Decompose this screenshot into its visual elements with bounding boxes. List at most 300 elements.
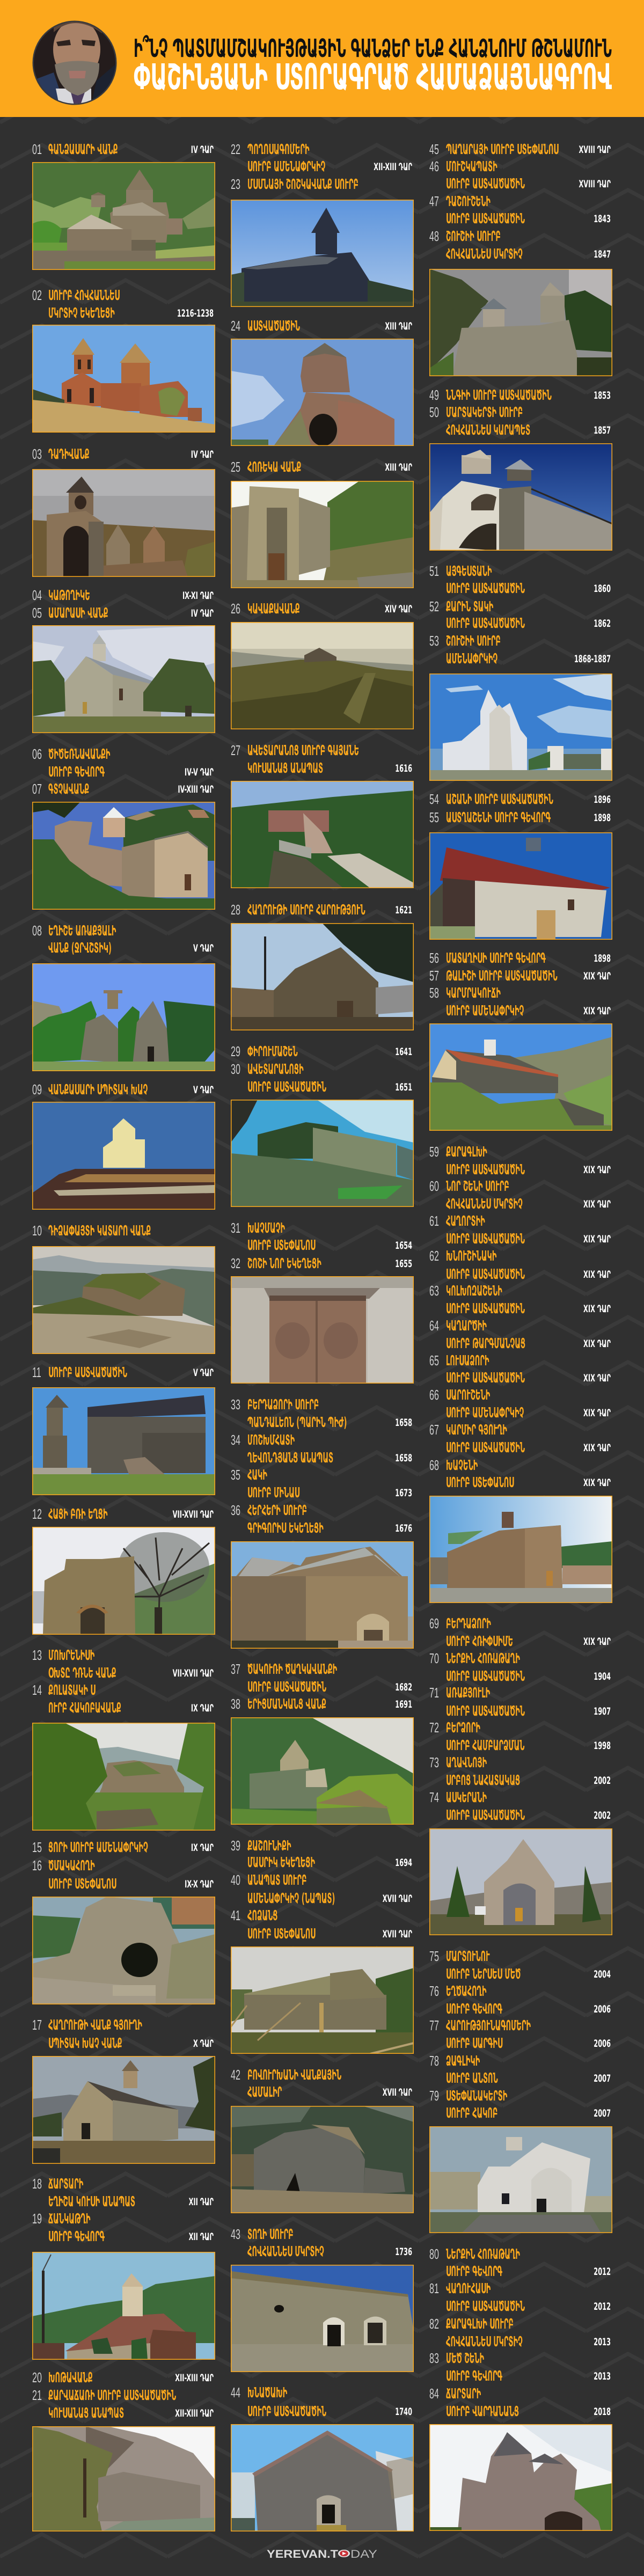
- entry 32: [231, 1255, 412, 1271]
- entry 16: 16: [32, 1857, 42, 1874]
- entry 50: ՄԱՐՏԱԿԵՐՏԻ ՍՈՒՐԲ: [446, 404, 523, 420]
- entry 54: 54: [429, 791, 439, 807]
- entry 59: XIX ԴԱՐ: [583, 1163, 611, 1176]
- photo 58: [429, 1023, 612, 1131]
- entry 25: [231, 459, 412, 475]
- entry 69: [429, 1615, 611, 1649]
- entry 15: IX ԴԱՐ: [191, 1841, 214, 1854]
- entry 16: [32, 1857, 214, 1892]
- entry 65: ԼՈՒՍԱՁՈՐԻ: [446, 1352, 489, 1368]
- entry 55: [429, 809, 611, 825]
- entry 09: V ԴԱՐ: [193, 1084, 214, 1096]
- entry 56: 56: [429, 950, 439, 966]
- entry 77: 77: [429, 2017, 439, 2033]
- photo 09: [32, 1102, 215, 1210]
- entry 54: ԱՇԱՆԻ ՍՈՒՐԲ ԱՍՏՎԱԾԱԾԻՆ: [446, 791, 553, 807]
- entry 81: ՍՈՒՐԲ ԱՍՏՎԱԾԱԾԻՆ: [446, 2298, 525, 2314]
- entry 29: [231, 1043, 412, 1059]
- photo 19: [32, 2252, 215, 2360]
- entry 42: 42: [231, 2067, 240, 2083]
- entry 37: 1682: [395, 1681, 412, 1693]
- photo 79: [429, 2126, 612, 2233]
- entry 61: ՍՈՒՐԲ ԱՍՏՎԱԾԱԾԻՆ: [446, 1231, 525, 1247]
- entry 14: [32, 1682, 214, 1716]
- entry 66: XIX ԴԱՐ: [583, 1407, 611, 1419]
- entry 72: ԲԵՐՁՈՐԻ: [446, 1719, 480, 1736]
- entry 28: [231, 902, 412, 918]
- entry 08: V ԴԱՐ: [193, 942, 214, 954]
- photo 32: [231, 1276, 414, 1384]
- entry 11: ՍՈՒՐԲ ԱՍՏՎԱԾԱԾԻՆ: [48, 1364, 127, 1380]
- entry 60: XIX ԴԱՐ: [583, 1198, 611, 1210]
- entry 69: ԲԵՐԴԱՁՈՐԻ: [446, 1615, 491, 1631]
- entry 12: VII-XVII ԴԱՐ: [173, 1508, 214, 1520]
- entry 41: ՍՈՒՐԲ ՍՏԵՓԱՆՈՍ: [247, 1926, 316, 1942]
- entry 35: [231, 1467, 412, 1501]
- entry 04: IX-XI ԴԱՐ: [182, 589, 214, 602]
- photo 41: [231, 1946, 414, 2054]
- entry 83: [429, 2350, 611, 2384]
- entry 17: 17: [32, 2017, 42, 2033]
- entry 58: [429, 985, 611, 1019]
- photo 10: [32, 1246, 215, 1354]
- entry 44: 1740: [395, 2405, 412, 2418]
- entry 29: ՓԻՐՈՒՄԱՇԵՆ: [247, 1043, 298, 1059]
- entry 72: [429, 1719, 611, 1753]
- entry 53: 53: [429, 633, 439, 649]
- entry 32: ՇՈՇԻ ՆՈՐ ԵԿԵՂԵՑԻ: [247, 1255, 321, 1271]
- entry 39: 1694: [395, 1856, 412, 1869]
- entry 81: [429, 2280, 611, 2314]
- entry 64: 64: [429, 1318, 439, 1334]
- entry 18: 18: [32, 2176, 42, 2192]
- entry 44: 44: [231, 2384, 240, 2401]
- entry 60: ՆՈՐ ՇԵՆԻ ՍՈՒՐԲ: [446, 1178, 509, 1194]
- entry 41: ՀՈՁԱՆՑ: [247, 1907, 277, 1923]
- entry 49: ՆՆԳԻԻ ՍՈՒՐԲ ԱՍՏՎԱԾԱԾԻՆ: [446, 387, 552, 403]
- entry 08: ՎԱՆՔ (ՋՐՎՇՏԻԿ): [48, 940, 112, 956]
- entry 36: [231, 1502, 412, 1536]
- entry 51: 1860: [594, 582, 611, 595]
- photo 74: [429, 1828, 612, 1935]
- entry 22: 22: [231, 141, 240, 157]
- entry 48: 48: [429, 228, 439, 244]
- entry 67: [429, 1422, 611, 1455]
- entry 26: XIV ԴԱՐ: [385, 603, 412, 615]
- entry 55: 1898: [594, 811, 611, 824]
- entry 52: ՍՈՒՐԲ ԱՍՏՎԱԾԱԾԻՆ: [446, 615, 525, 631]
- entry 56: [429, 950, 611, 966]
- entry 50: 50: [429, 404, 439, 420]
- entry 35: ՍՈՒՐԲ ՄԻՆԱՍ: [247, 1484, 299, 1501]
- entry 55: 55: [429, 809, 439, 825]
- portrait: [32, 19, 118, 105]
- entry 71: 1907: [594, 1705, 611, 1717]
- logo: Yerevan Today: YEREVAN.T: [267, 2548, 338, 2560]
- logo: Yerevan Today: DAY: [350, 2548, 377, 2560]
- entry 57: 57: [429, 968, 439, 984]
- entry 63: ԿՈԼԽՈԶԱՇԵՆԻ: [446, 1283, 502, 1299]
- entry 45: ՊԱՂԱՐԱՅԻ ՍՈՒՐԲ ՍՏԵՓԱՆՈՍ: [446, 141, 559, 157]
- entry 69: XIX ԴԱՐ: [583, 1635, 611, 1648]
- entry 36: ԳՐԻԳՈՐԻՍ ԵԿԵՂԵՑԻ: [247, 1520, 324, 1536]
- entry 59: ՔԱՐԱԳԼԽԻ: [446, 1144, 487, 1160]
- entry 84: ՃԱՐՏԱՐԻ: [446, 2385, 481, 2402]
- photo 11: [32, 1387, 215, 1495]
- entry 80: 2012: [594, 2265, 611, 2278]
- entry 68: ՍՈՒՐԲ ՍՏԵՓԱՆՈՍ: [446, 1474, 514, 1490]
- photo 50: [429, 443, 612, 551]
- entry 84: 2018: [594, 2405, 611, 2418]
- entry 41: [231, 1907, 412, 1942]
- entry 64: [429, 1318, 611, 1351]
- entry 07: ԳՏՉԱՎԱՆՔ: [48, 781, 89, 797]
- photo 55: [429, 832, 612, 940]
- entry 03: IV ԴԱՐ: [191, 448, 214, 460]
- photo 36: [231, 1541, 414, 1649]
- entry 63: [429, 1283, 611, 1316]
- entry 48: 1847: [594, 248, 611, 260]
- entry 47: 47: [429, 193, 439, 209]
- entry 38: ԵՐԻՑՄԱՆԿԱՆՑ ՎԱՆՔ: [247, 1696, 326, 1712]
- entry 52: ՔԱՐԻՆ ՏԱԿԻ: [446, 598, 493, 614]
- entry 44: ԽՆԱԾԱԽԻ: [247, 2384, 288, 2401]
- entry 16: ՍՈՒՐԲ ՍՏԵՓԱՆՈՍ: [48, 1876, 116, 1892]
- entry 13: ՕԽՏԸ ԴՌՆԵ ՎԱՆՔ: [48, 1665, 116, 1681]
- entry 01: 01: [32, 141, 42, 157]
- entry 05: [32, 605, 214, 621]
- entry 76: ԵՂԾԱՀՈՂԻ: [446, 1983, 487, 1999]
- entry 01: IV ԴԱՐ: [191, 143, 214, 156]
- entry 19: ՍՈՒՐԲ ԳԵՎՈՐԳ: [48, 2228, 105, 2244]
- entry 34: 34: [231, 1432, 240, 1448]
- entry 16: IX-X ԴԱՐ: [185, 1878, 214, 1890]
- entry 70: 1904: [594, 1670, 611, 1682]
- entry 59: ՍՈՒՐԲ ԱՍՏՎԱԾԱԾԻՆ: [446, 1161, 525, 1177]
- entry 23: 23: [231, 176, 240, 192]
- entry 69: 69: [429, 1615, 439, 1631]
- entry 57: [429, 968, 611, 984]
- entry 62: XIX ԴԱՐ: [583, 1268, 611, 1280]
- entry 36: ՀԵՐՀԵՐԻ ՍՈՒՐԲ: [247, 1502, 307, 1518]
- entry 21: XII-XIII ԴԱՐ: [175, 2407, 214, 2419]
- entry 46: XVIII ԴԱՐ: [579, 178, 611, 190]
- photo 17: [32, 2056, 215, 2164]
- entry 44: ՍՈՒՐԲ ԱՍՏՎԱԾԱԾԻՆ: [247, 2403, 326, 2419]
- entry 42: ԲՈՎՈՒՐԽԱՆԻ ՎԱՆՔԱՅԻՆ: [247, 2067, 341, 2083]
- entry 31: ԽԱՉՄԱՉԻ: [247, 1220, 285, 1236]
- entry 16: ԾՄԱԿԱՀՈՂԻ: [48, 1857, 95, 1874]
- entry 40: 40: [231, 1872, 240, 1888]
- entry 36: 1676: [395, 1522, 412, 1534]
- entry 76: 76: [429, 1983, 439, 1999]
- entry 39: [231, 1838, 412, 1870]
- entry 52: 1862: [594, 617, 611, 630]
- entry 39: 39: [231, 1838, 240, 1854]
- photo 14: [32, 1723, 215, 1831]
- entry 78: 78: [429, 2053, 439, 2069]
- entry 79: 79: [429, 2088, 439, 2104]
- entry 24: ԱՍՏՎԱԾԱԾԻՆ: [247, 318, 300, 334]
- entry 33: 1658: [395, 1416, 412, 1429]
- entry 36: 36: [231, 1502, 240, 1518]
- entry 61: 61: [429, 1213, 439, 1229]
- entry 24: [231, 318, 412, 334]
- entry 53: ԱՄԵՆԱՓՐԿԻՉ: [446, 650, 497, 667]
- entry 02: 1216-1238: [177, 307, 214, 319]
- entry 31: 31: [231, 1220, 240, 1236]
- entry 06: IV-V ԴԱՐ: [185, 766, 214, 778]
- entry 08: 08: [32, 923, 42, 939]
- entry 02: ՄԿՐՏԻՉ ԵԿԵՂԵՑԻ: [48, 305, 115, 321]
- entry 09: ՎԱՆՔԱՍԱՐԻ ՍՊԻՏԱԿ ԽԱՉ: [48, 1081, 148, 1097]
- entry 76: [429, 1983, 611, 2017]
- entry 33: ՊԱՆԴԱԼԵՈՆ (ՊԱՐԻՆ ՊԻԺ): [247, 1414, 347, 1430]
- entry 34: ՂԵՎՈՆԴՅԱՆՑ ԱՆԱՊԱՏ: [247, 1450, 333, 1466]
- entry 18: XII ԴԱՐ: [189, 2196, 214, 2208]
- entry 29: 1641: [395, 1045, 412, 1058]
- entry 71: [429, 1685, 611, 1719]
- entry 39: ՄԱՍՐԻԿ ԵԿԵՂԵՑԻ: [247, 1854, 315, 1870]
- entry 73: 2002: [594, 1774, 611, 1787]
- entry 46: 46: [429, 158, 439, 174]
- entry 20: XII-XIII ԴԱՐ: [175, 2372, 214, 2384]
- entry 68: XIX ԴԱՐ: [583, 1476, 611, 1489]
- entry 51: ԱՅԳԵՍՏԱՆԻ: [446, 563, 492, 579]
- entry 02: 02: [32, 287, 42, 303]
- entry 30: [231, 1061, 412, 1095]
- entry 10: ԴԻՁԱՓԱՅՏԻ ԿԱՏԱՐՈ ՎԱՆՔ: [48, 1223, 151, 1239]
- entry 51: ՍՈՒՐԲ ԱՍՏՎԱԾԱԾԻՆ: [446, 580, 525, 596]
- entry 23: ՄՍՄՆԱՅԻ ՇՈՇԿԱՎԱՆՔ ՍՈՒՐԲ: [247, 176, 358, 192]
- entry 41: XVII ԴԱՐ: [383, 1928, 412, 1940]
- photo 48: [429, 269, 612, 376]
- entry 46: ՄՈՒՇԿԱՊԱՏԻ: [446, 158, 497, 174]
- photo 27: [231, 781, 414, 888]
- entry 26: [231, 601, 412, 617]
- photo 12: [32, 1527, 215, 1635]
- photo 30: [231, 1100, 414, 1207]
- entry 15: 15: [32, 1839, 42, 1855]
- entry 27: 1616: [395, 762, 412, 774]
- entry 76: ՍՈՒՐԲ ԳԵՎՈՐԳ: [446, 2001, 502, 2017]
- entry 78: [429, 2053, 611, 2086]
- entry 72: 72: [429, 1719, 439, 1736]
- entry 42: [231, 2067, 412, 2100]
- entry 81: ՎԱՂՈՒՀԱՍԻ: [446, 2280, 491, 2296]
- entry 30: 1651: [395, 1081, 412, 1093]
- entry 54: [429, 791, 611, 807]
- entry 47: 1843: [594, 213, 611, 225]
- entry 37: [231, 1661, 412, 1695]
- entry 27: 27: [231, 742, 240, 758]
- entry 48: [429, 228, 611, 262]
- entry 71: ԱՌԱՔՅՈՒԼԻ: [446, 1685, 490, 1701]
- entry 40: [231, 1872, 412, 1906]
- photo 23: [231, 200, 414, 307]
- entry 30: 30: [231, 1061, 240, 1077]
- entry 75: 2004: [594, 1968, 611, 1980]
- entry 82: ՀՈՎՀԱՆՆԵՍ ՄԿՐՏԻՉ: [446, 2333, 523, 2350]
- entry 39: ՔԱՇՈՒՆԻՔԻ: [247, 1838, 291, 1854]
- entry 80: [429, 2246, 611, 2279]
- photo 43: [231, 2265, 414, 2372]
- entry 59: 59: [429, 1144, 439, 1160]
- entry 24: 24: [231, 318, 240, 334]
- entry 78: ՁԱԳԼԻԿԻ: [446, 2053, 480, 2069]
- entry 03: [32, 446, 214, 462]
- entry 75: 75: [429, 1948, 439, 1964]
- entry 04: [32, 587, 214, 603]
- entry 57: ԹԱԼԻՇԻ ՍՈՒՐԲ ԱՍՏՎԱԾԱԾԻՆ: [446, 968, 558, 984]
- entry 65: 65: [429, 1352, 439, 1368]
- logo: Yerevan Today: [267, 2548, 377, 2560]
- entry 27: ԱՎԵՏԱՐԱՆՈՑ ՍՈՒՐԲ ԳԱՅԱՆԵ: [247, 742, 359, 758]
- entry 64: ԿԱՂԱՐԾԻԻ: [446, 1318, 487, 1334]
- entry 38: [231, 1696, 412, 1712]
- entry 66: ՍԱՐՈՒՇԵՆԻ: [446, 1387, 491, 1403]
- entry 59: [429, 1144, 611, 1177]
- entry 82: 82: [429, 2316, 439, 2332]
- entry 66: 66: [429, 1387, 439, 1403]
- entry 74: ԱՍԿԵՐԱՆԻ: [446, 1789, 487, 1805]
- entry 01: [32, 141, 214, 157]
- photo 68: [429, 1496, 612, 1603]
- entry 05: 05: [32, 605, 42, 621]
- entry 52: 52: [429, 598, 439, 614]
- entry 28: 28: [231, 902, 240, 918]
- entry 71: ՍՈՒՐԲ ԱՍՏՎԱԾԱԾԻՆ: [446, 1703, 525, 1719]
- entry 31: 1654: [395, 1239, 412, 1252]
- entry 56: 1898: [594, 952, 611, 964]
- entry 68: ԽԱՉԵՆԻ: [446, 1457, 478, 1473]
- entry 43: 43: [231, 2226, 240, 2242]
- entry 20: [32, 2369, 214, 2385]
- entry 04: 04: [32, 587, 42, 603]
- entry 18: ԵՂԻՇԱ ԿՈՒՍԻ ԱՆԱՊԱՏ: [48, 2193, 135, 2209]
- entry 67: ՍՈՒՐԲ ԱՍՏՎԱԾԱԾԻՆ: [446, 1439, 525, 1455]
- entry 38: 38: [231, 1696, 240, 1712]
- entry 84: 84: [429, 2385, 439, 2402]
- photo 07: [32, 802, 215, 910]
- entry 34: 1658: [395, 1452, 412, 1464]
- entry 64: XIX ԴԱՐ: [583, 1337, 611, 1350]
- entry 14: IX ԴԱՐ: [191, 1702, 214, 1714]
- entry 70: ՍՈՒՐԲ ԱՍՏՎԱԾԱԾԻՆ: [446, 1668, 525, 1684]
- entry 34: ՄՈՇԽՄՀԱՏԻ: [247, 1432, 295, 1448]
- entry 56: ՄԱՏԱՂԻՍԻ ՍՈՒՐԲ ԳԵՎՈՐԳ: [446, 950, 546, 966]
- entry 15: ՑՈՐԻ ՍՈՒՐԲ ԱՄԵՆԱՓՐԿԻՉ: [48, 1839, 148, 1855]
- entry 80: 80: [429, 2246, 439, 2262]
- entry 65: ՍՈՒՐԲ ԱՍՏՎԱԾԱԾԻՆ: [446, 1370, 525, 1386]
- entry 11: [32, 1364, 214, 1380]
- entry 79: ՍՈՒՐԲ ՀԱԿՈԲ: [446, 2105, 497, 2121]
- entry 81: 81: [429, 2280, 439, 2296]
- entry 10: 10: [32, 1223, 42, 1239]
- entry 06: 06: [32, 746, 42, 762]
- entry 27: ԿՈՒՍԱՆԱՑ ԱՆԱՊԱՏ: [247, 760, 323, 776]
- entry 19: [32, 2211, 214, 2244]
- entry 47: ԴԱՇՈՒՇԵՆԻ: [446, 193, 491, 209]
- entry 05: IV ԴԱՐ: [191, 607, 214, 619]
- entry 33: [231, 1396, 412, 1430]
- entry 17: ՍՊԻՏԱԿ ԽԱՉ ՎԱՆՔ: [48, 2035, 122, 2051]
- entry 74: ՍՈՒՐԲ ԱՍՏՎԱԾԱԾԻՆ: [446, 1807, 525, 1823]
- entry 70: 70: [429, 1650, 439, 1666]
- entry 08: [32, 923, 214, 956]
- photo 38: [231, 1717, 414, 1825]
- entry 29: 29: [231, 1043, 240, 1059]
- icon: play button: [338, 2550, 350, 2557]
- entry 63: ՍՈՒՐԲ ԱՍՏՎԱԾԱԾԻՆ: [446, 1300, 525, 1316]
- entry 30: ՍՈՒՐԲ ԱՍՏՎԱԾԱԾԻՆ: [247, 1079, 326, 1095]
- entry 80: ՍՈՒՐԲ ԳԵՎՈՐԳ: [446, 2263, 502, 2279]
- entry 37: ՍՈՒՐԲ ԱՍՏՎԱԾԱԾԻՆ: [247, 1679, 326, 1695]
- entry 14: 14: [32, 1682, 42, 1698]
- entry 58: 58: [429, 985, 439, 1001]
- entry 77: ՍՈՒՐԲ ՍԱՐԳԻՍ: [446, 2035, 502, 2051]
- entry 65: XIX ԴԱՐ: [583, 1372, 611, 1384]
- photo 42: [231, 2106, 414, 2213]
- entry 42: XVII ԴԱՐ: [383, 2086, 412, 2098]
- entry 25: 25: [231, 459, 240, 475]
- entry 04: ԿԱԹՈՂԻԿԵ: [48, 587, 90, 603]
- header band: [0, 0, 644, 117]
- entry 26: 26: [231, 601, 240, 617]
- entry 53: [429, 633, 611, 667]
- entry 12: [32, 1506, 214, 1522]
- entry 79: 2007: [594, 2107, 611, 2119]
- entry 75: [429, 1948, 611, 1982]
- entry 06: ՍՈՒՐԲ ԳԵՎՈՐԳ: [48, 764, 105, 780]
- entry 30: ԱՎԵՏԱՐԱՆՈՑԻ: [247, 1061, 304, 1077]
- entry 75: ՍՈՒՐԲ ՆԵՐՍԵՍ ՄԵԾ: [446, 1966, 521, 1982]
- entry 73: 73: [429, 1754, 439, 1770]
- entry 65: [429, 1352, 611, 1386]
- entry 19: ՃԱՆԿԱԹՂԻ: [48, 2211, 91, 2227]
- entry 32: 32: [231, 1255, 240, 1271]
- entry 60: 60: [429, 1178, 439, 1194]
- entry 20: 20: [32, 2369, 42, 2385]
- entry 25: XIII ԴԱՐ: [385, 461, 412, 473]
- entry 57: XIX ԴԱՐ: [583, 970, 611, 982]
- entry 22: XII-XIII ԴԱՐ: [374, 160, 412, 173]
- entry 28: 1621: [395, 904, 412, 916]
- entry 77: [429, 2017, 611, 2051]
- entry 74: [429, 1789, 611, 1823]
- entry 44: [231, 2384, 412, 2419]
- entry 84: [429, 2385, 611, 2419]
- photo 53: [429, 674, 612, 781]
- entry 52: [429, 598, 611, 631]
- entry 61: XIX ԴԱՐ: [583, 1233, 611, 1245]
- entry 27: [231, 742, 412, 776]
- entry 43: [231, 2226, 412, 2259]
- photo 44: [231, 2424, 414, 2531]
- entry 49: [429, 387, 611, 403]
- entry 68: 68: [429, 1457, 439, 1473]
- entry 83: 83: [429, 2350, 439, 2366]
- entry 45: XVIII ԴԱՐ: [579, 143, 611, 156]
- entry 68: [429, 1457, 611, 1490]
- entry 63: XIX ԴԱՐ: [583, 1302, 611, 1315]
- entry 54: 1896: [594, 793, 611, 806]
- entry 50: 1857: [594, 424, 611, 436]
- entry 46: ՍՈՒՐԲ ԱՍՏՎԱԾԱԾԻՆ: [446, 175, 525, 192]
- photo 08: [32, 963, 215, 1071]
- entry 79: ՍՏԵՓԱՆԱԿԵՐՏԻ: [446, 2088, 507, 2104]
- entry 83: ՄԵԾ ՇԵՆԻ: [446, 2350, 484, 2366]
